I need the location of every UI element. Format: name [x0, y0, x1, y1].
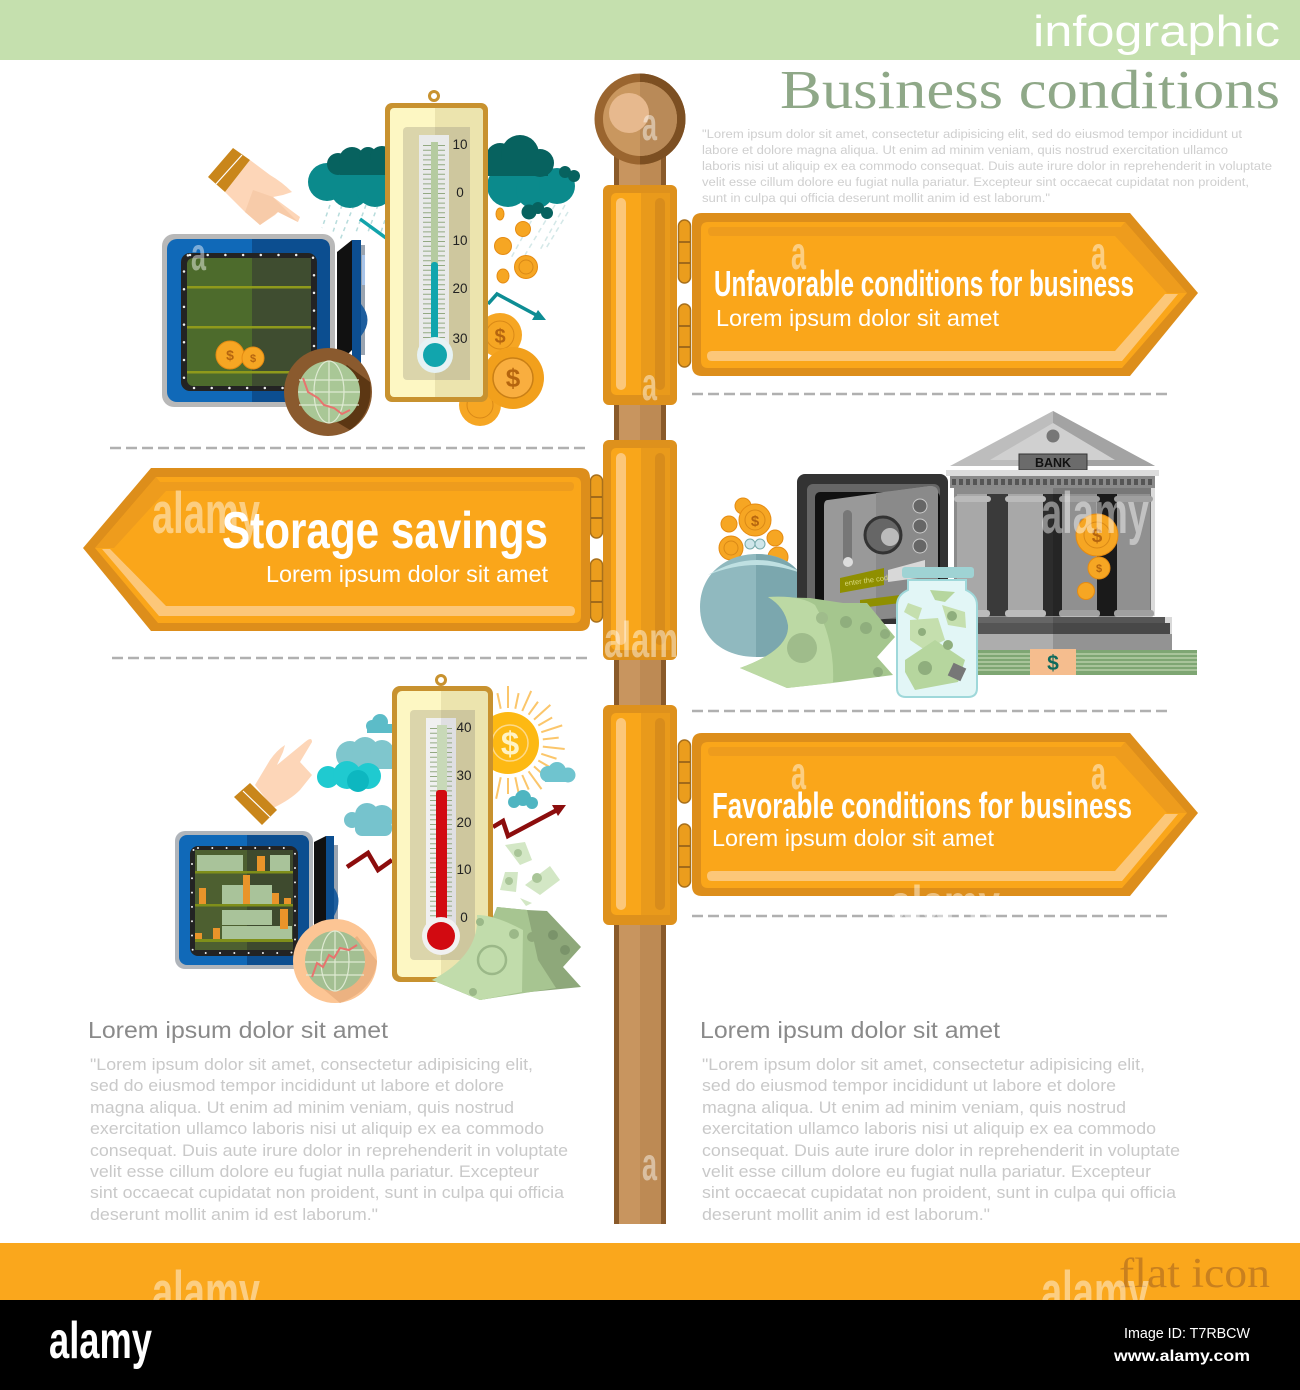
title: Business conditions [780, 59, 1280, 120]
text block: left paragraph: deserunt mollit anim id est laborum." [90, 1205, 378, 1224]
header band [0, 0, 1300, 60]
icon: coins over purse: $ [751, 513, 760, 530]
text block: left paragraph: exercitation ullamco laboris nisi ut aliquip ex ea commodo [90, 1119, 544, 1138]
watermarks: a [1091, 227, 1106, 279]
thermometer scale: 0 [456, 185, 464, 200]
icon: bank coins: $ [1096, 563, 1102, 575]
illustration: unfavorable conditions [162, 92, 580, 436]
pole knob [594, 74, 686, 164]
thermometer scale [452, 137, 468, 346]
bank name plate [1019, 454, 1087, 470]
icon: sun coin [477, 686, 565, 799]
icon: bank coins: $ [1092, 526, 1103, 547]
sign: unfavorable conditions [678, 213, 1198, 376]
intro text block: sunt in culpa qui officia deserunt mollit anim id est laborum." [702, 191, 1050, 205]
watermarks: a [1091, 747, 1106, 799]
intro text block: velit esse cillum dolore eu fugiat nulla pariatur. Excepteur sint occaecat cupidatat non proident, [702, 175, 1249, 189]
icon: vault open: enter the code [844, 572, 893, 588]
text block: right paragraph: "Lorem ipsum dolor sit amet, consectetur adipisicing elit, [702, 1055, 1145, 1074]
watermarks: alam [604, 612, 678, 668]
intro text block [702, 127, 1272, 205]
collar: middle [603, 440, 677, 660]
icon: storm cloud left [308, 146, 402, 240]
icon: banknote stack [977, 649, 1197, 675]
text block: left paragraph: sint occaecat cupidatat non proident, sunt in culpa qui officia [90, 1183, 565, 1202]
collar: top [603, 185, 677, 405]
watermarks [152, 98, 1149, 1325]
thermometer scale: 30 [452, 331, 468, 346]
thermometer scale: 20 [452, 281, 468, 296]
thermometer scale: 10 [456, 862, 472, 877]
icon: falling chart arrow [488, 294, 546, 320]
icon: jar of money [897, 567, 977, 697]
icon: rising chart arrow [347, 805, 566, 870]
watermarks: alamy [1041, 481, 1149, 546]
icon: coin stack: $ [506, 363, 521, 393]
watermarks: alamy [890, 876, 1000, 928]
watermarks: alamy [1041, 1260, 1149, 1325]
icon: banknotes [740, 597, 895, 688]
thermometer scale: 40 [456, 720, 472, 735]
icon: clouds [317, 714, 576, 836]
text block: right paragraph: exercitation ullamco laboris nisi ut aliquip ex ea commodo [702, 1119, 1156, 1138]
alamy logo: alamy [49, 1312, 152, 1370]
collar: bottom [603, 705, 677, 925]
sign heading: Storage savings [222, 502, 548, 560]
thermometer scale [456, 720, 472, 925]
text block: left paragraph: "Lorem ipsum dolor sit amet, consectetur adipisicing elit, [90, 1055, 533, 1074]
image id: Image ID: T7RBCW [1124, 1325, 1251, 1342]
thermometer scale: 10 [452, 233, 468, 248]
icon: storm cloud right [486, 135, 580, 260]
footer band [0, 1243, 1300, 1300]
icon: coins over purse [719, 498, 788, 567]
watermarks: a [791, 747, 806, 799]
icon: vault empty [162, 234, 368, 407]
thermometer cold [385, 92, 488, 402]
text block: right paragraph: consequat. Duis aute irure dolor in reprehenderit in voluptate [702, 1141, 1180, 1160]
sign subtext: Lorem ipsum dolor sit amet [716, 305, 1000, 331]
footer label: flat icon: flat icon [1119, 1251, 1270, 1297]
text block: left paragraph: velit esse cillum dolore eu fugiat nulla pariatur. Excepteur [90, 1162, 539, 1181]
watermarks: a [642, 1138, 657, 1190]
thermometer scale: 0 [460, 910, 468, 925]
sign: favorable conditions [678, 733, 1198, 896]
icon: vault empty: $ [250, 353, 256, 365]
icon: falling coins [494, 208, 538, 283]
text block: right paragraph [702, 1055, 1180, 1224]
icon: pointing hand down [208, 148, 300, 225]
icon: bank [946, 411, 1172, 650]
icon: coin stack: $ [494, 326, 506, 348]
header label: infographic: infographic [1033, 7, 1280, 56]
sign subtext: Lorem ipsum dolor sit amet [712, 825, 995, 851]
sign heading: Favorable conditions for business [712, 785, 1132, 826]
watermarks: a [791, 227, 806, 279]
black credit bar [0, 1300, 1300, 1390]
text block: right paragraph: deserunt mollit anim id est laborum." [702, 1205, 990, 1224]
icon: vault open [797, 474, 948, 624]
icon: banknotes with flying bills [432, 842, 581, 1000]
intro text block: labore et dolore magna aliqua. Ut enim ad minim veniam, quis nostrud exercitation ullamco [702, 143, 1228, 157]
text block: left paragraph: magna aliqua. Ut enim ad minim veniam, quis nostrud [90, 1098, 514, 1117]
thermometer scale: 20 [456, 815, 472, 830]
watermarks: alamy [152, 481, 260, 546]
icon: sun coin: $ [501, 725, 519, 762]
illustration: storage savings [700, 411, 1197, 697]
text block: right paragraph: velit esse cillum dolore eu fugiat nulla pariatur. Excepteur [702, 1162, 1151, 1181]
text block: left paragraph: sed do eiusmod tempor incididunt ut labore et dolore [90, 1076, 504, 1095]
text block: right paragraph: magna aliqua. Ut enim ad minim veniam, quis nostrud [702, 1098, 1126, 1117]
watermarks: a [642, 98, 657, 150]
thermometer warm [392, 676, 493, 982]
bank name plate: BANK [1035, 456, 1071, 470]
illustration: favorable conditions [175, 676, 581, 1003]
intro text block: "Lorem ipsum dolor sit amet, consectetur adipisicing elit, sed do eiusmod tempor incididunt ut [702, 127, 1243, 141]
icon: purse [700, 539, 810, 657]
icon: globe falling [284, 348, 372, 436]
watermarks: a [191, 228, 206, 280]
icon: pointing hand up [234, 739, 312, 825]
text block: right subheading: Lorem ipsum dolor sit amet [700, 1017, 1001, 1043]
thermometer scale: 30 [456, 768, 472, 783]
sign: storage savings [83, 468, 602, 631]
text block: right paragraph: sed do eiusmod tempor incididunt ut labore et dolore [702, 1076, 1116, 1095]
icon: vault empty: $ [226, 347, 234, 363]
text block: right paragraph: sint occaecat cupidatat non proident, sunt in culpa qui officia [702, 1183, 1177, 1202]
watermarks: a [642, 358, 657, 410]
sign subtext: Lorem ipsum dolor sit amet [266, 561, 549, 587]
icon: banknote stack: $ [1047, 652, 1059, 675]
icon: globe rising [293, 919, 377, 1003]
intro text block: laboris nisi ut aliquip ex ea commodo consequat. Duis aute irure dolor in reprehenderit in voluptate [702, 159, 1272, 173]
text block: left paragraph [90, 1055, 568, 1224]
watermarks: alamy [152, 1260, 260, 1325]
text block: left paragraph: consequat. Duis aute irure dolor in reprehenderit in voluptate [90, 1141, 568, 1160]
icon: bank coins [1076, 514, 1118, 600]
website: www.alamy.com [1113, 1348, 1250, 1365]
icon: coin stack [459, 313, 544, 426]
thermometer scale: 10 [452, 137, 468, 152]
icon: vault full [175, 831, 338, 969]
text block: left subheading: Lorem ipsum dolor sit amet [88, 1017, 389, 1043]
signpost pole [594, 74, 686, 1224]
